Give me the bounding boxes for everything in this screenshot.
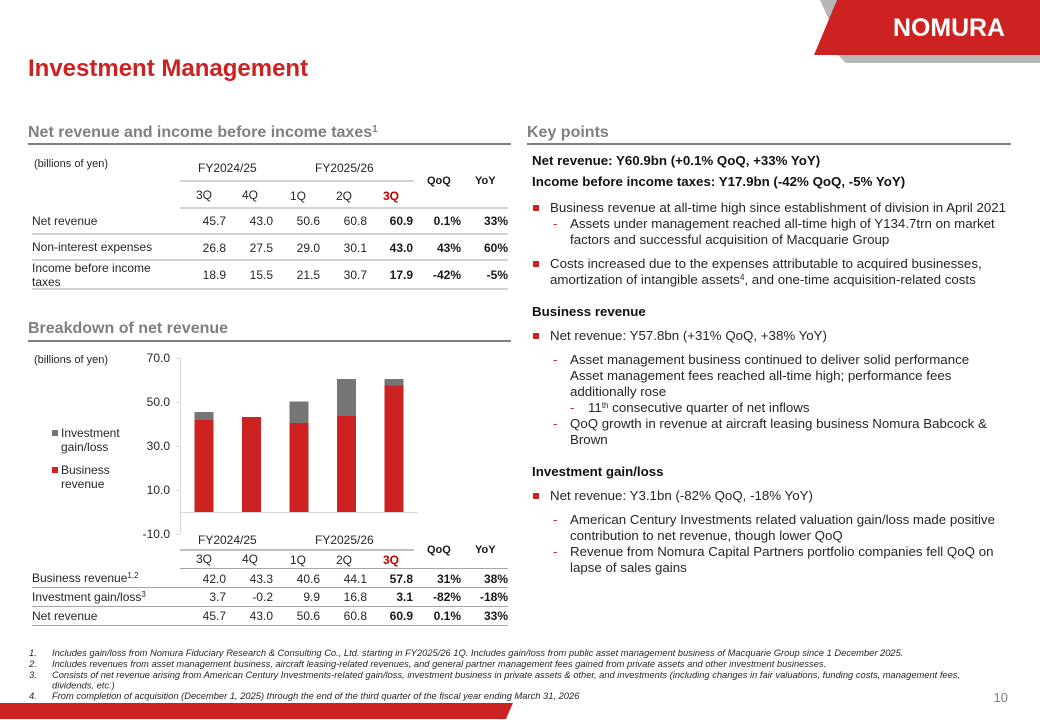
table: breakdown of net revenue: 3.1 [396,590,413,604]
table: breakdown of net revenue: -0.2 [252,590,273,604]
table: breakdown of net revenue: 60.8 [344,609,367,623]
business revenue section: 11 [588,400,602,415]
footnotes: 4. [29,691,37,701]
investment gain/loss section: Net revenue: Y3.1bn (-82% QoQ, -18% YoY) [550,488,813,503]
key points summary [532,153,905,189]
page number: 10 [994,690,1008,705]
business revenue section: - [553,416,557,431]
table: breakdown of net revenue: 3Q [383,553,399,567]
table: net revenue and income: FY2025/26 [315,161,374,175]
table: breakdown of net revenue: 31% [437,572,461,586]
table: breakdown of net revenue: FY2024/25 [198,533,257,547]
table: net revenue and income: 3Q [196,188,212,202]
table: net revenue and income: 43.0 [390,241,413,255]
investment gain/loss section: lapse of sales gains [570,560,687,575]
table: breakdown of net revenue: 43.0 [250,609,273,623]
table: breakdown of net revenue: Net revenue [32,609,98,623]
footnotes: dividends, etc.) [52,680,115,690]
key points bullets [533,200,1006,287]
table: net revenue and income [32,158,508,290]
footnotes: Includes gain/loss from Nomura Fiduciary Research & Consulting Co., Ltd. starting in FY2025/26 1Q. Includes gain/loss from public asset management business of Macquarie Group since 1 December 2025. [52,648,903,658]
business revenue section: - [553,352,557,367]
chart legend: Business [61,463,110,477]
footnotes: Consists of net revenue arising from American Century Investments-related gain/loss, investment business in private assets & other, and investments (including changes in fair valuations, funding costs, management fees, [52,670,960,680]
table: breakdown of net revenue: 0.1% [434,609,461,623]
table: breakdown of net revenue: 4Q [242,552,258,566]
table: breakdown of net revenue: -18% [480,590,508,604]
stacked bar chart: 50.0 [147,395,170,409]
key points bullets: Business revenue at all-time high since establishment of division in April 2021 [550,200,1006,215]
table: breakdown of net revenue: 44.1 [344,572,367,586]
key points bullets: amortization of intangible assets [550,272,740,287]
heading: key points: Key points [527,124,609,141]
table: net revenue and income: (billions of yen) [34,158,108,170]
key points bullets: Assets under management reached all-time high of Y134.7trn on market [570,216,995,231]
table: net revenue and income: 26.8 [203,241,226,255]
chart legend: Investment [61,426,120,440]
table: breakdown of net revenue: 9.9 [303,590,320,604]
stacked bar chart [34,351,418,541]
table: breakdown of net revenue: 40.6 [297,572,320,586]
business revenue section: th [602,401,608,410]
key points summary: Income before income taxes: Y17.9bn (-42% QoQ, -5% YoY) [532,174,905,189]
heading: net revenue and income [28,124,511,145]
title: Investment Management [28,55,308,82]
table: net revenue and income: 3Q [383,189,399,203]
chart legend: gain/loss [61,440,108,454]
table: breakdown of net revenue: 3.7 [209,590,226,604]
key points summary: Net revenue: Y60.9bn (+0.1% QoQ, +33% YoY) [532,153,820,168]
table: net revenue and income: Non-interest expenses [32,240,152,254]
table: net revenue and income: QoQ [427,175,451,187]
business revenue section: consecutive quarter of net inflows [608,400,810,415]
chart legend [52,426,120,491]
table: breakdown of net revenue: 50.6 [297,609,320,623]
table: net revenue and income: Net revenue [32,214,98,228]
investment gain/loss section: contribution to net revenue, though lower QoQ [570,528,843,543]
business revenue section: Business revenue [532,304,646,319]
heading: breakdown of net revenue: Breakdown of net revenue [28,320,228,337]
table: breakdown of net revenue: 33% [484,609,508,623]
footer bar [0,703,513,719]
investment gain/loss section: - [553,544,557,559]
stacked bar chart: (billions of yen) [34,354,108,366]
table: breakdown of net revenue: 3Q [196,552,212,566]
table: net revenue and income: 17.9 [390,268,413,282]
table: breakdown of net revenue: QoQ [427,544,451,556]
key points bullets: Costs increased due to the expenses attributable to acquired businesses, [550,256,982,271]
key points bullets: - [553,216,557,231]
footnotes: From completion of acquisition (December 1, 2025) through the end of the third quarter of the fiscal year ending March 31, 2026 [52,691,580,701]
investment gain/loss section: Revenue from Nomura Capital Partners portfolio companies fell QoQ on [570,544,993,559]
key points bullets: factors and successful acquisition of Macquarie Group [570,232,889,247]
table: breakdown of net revenue: Investment gain/loss [32,590,141,604]
key points bullets: , and one-time acquisition-related costs [744,272,976,287]
business revenue section: Asset management fees reached all-time high; performance fees [570,368,952,383]
table: breakdown of net revenue: 1,2 [127,571,139,580]
table: breakdown of net revenue: 57.8 [390,572,413,586]
footnotes: 2. [28,659,37,669]
table: breakdown of net revenue: 38% [484,572,508,586]
key points bullets: 4 [740,273,745,282]
heading: net revenue and income: 1 [372,124,378,135]
business revenue section [532,304,987,447]
footnotes: Includes revenues from asset management business, aircraft leasing-related revenues, and general partner management fees gained from private assets and other investment businesses. [52,659,826,669]
table: breakdown of net revenue: 43.3 [250,572,273,586]
table: net revenue and income: 21.5 [297,268,320,282]
table: net revenue and income: YoY [475,175,496,187]
business revenue section: additionally rose [570,384,666,399]
table: breakdown of net revenue: Business revenue [32,571,127,585]
table: net revenue and income: 33% [484,214,508,228]
investment gain/loss section: American Century Investments related valuation gain/loss made positive [570,512,995,527]
table: net revenue and income: 0.1% [434,214,461,228]
heading: net revenue and income: Net revenue and income before income taxes [28,124,372,141]
table: net revenue and income: 30.7 [344,268,367,282]
table: net revenue and income: 2Q [336,189,352,203]
investment gain/loss section: Investment gain/loss [532,464,664,479]
logo banner [814,0,1040,63]
business revenue section: Asset management business continued to deliver solid performance [570,352,969,367]
stacked bar chart: 10.0 [147,483,170,497]
table: breakdown of net revenue: YoY [475,544,496,556]
table: breakdown of net revenue: 3 [141,590,146,599]
table: breakdown of net revenue [32,533,508,626]
table: net revenue and income: 4Q [242,188,258,202]
table: breakdown of net revenue: 60.9 [390,609,413,623]
table: net revenue and income: -42% [433,268,461,282]
table: net revenue and income: 43% [437,241,461,255]
business revenue section: Brown [570,432,608,447]
investment gain/loss section [532,464,995,575]
table: breakdown of net revenue: FY2025/26 [315,533,374,547]
footnotes: 1. [29,648,37,658]
table: net revenue and income: 60% [484,241,508,255]
chart legend: revenue [61,477,105,491]
table: breakdown of net revenue: 42.0 [203,572,226,586]
table: net revenue and income: 50.6 [297,214,320,228]
table: net revenue and income: 27.5 [250,241,273,255]
table: net revenue and income: 29.0 [297,241,320,255]
table: net revenue and income: 43.0 [250,214,273,228]
investment gain/loss section: - [553,512,557,527]
table: net revenue and income: FY2024/25 [198,161,257,175]
table: breakdown of net revenue: 2Q [336,553,352,567]
table: breakdown of net revenue: 45.7 [203,609,226,623]
stacked bar chart: 70.0 [147,351,170,365]
table: net revenue and income: 60.8 [344,214,367,228]
table: net revenue and income: taxes [32,275,61,289]
business revenue section: QoQ growth in revenue at aircraft leasing business Nomura Babcock & [570,416,987,431]
table: net revenue and income: 30.1 [344,241,367,255]
footnotes [28,648,960,701]
table: net revenue and income: 45.7 [203,214,226,228]
table: net revenue and income: 18.9 [203,268,226,282]
table: net revenue and income: Income before income [32,261,151,275]
stacked bar chart: 30.0 [147,439,170,453]
table: net revenue and income: 15.5 [250,268,273,282]
logo banner: NOMURA [893,14,1005,42]
table: breakdown of net revenue: 1Q [290,553,306,567]
footnotes: 3. [29,670,37,680]
business revenue section: - [570,400,574,415]
business revenue section: Net revenue: Y57.8bn (+31% QoQ, +38% YoY) [550,328,827,343]
table: breakdown of net revenue: -82% [433,590,461,604]
stacked bar chart: -10.0 [143,527,170,541]
table: net revenue and income: -5% [487,268,508,282]
table: breakdown of net revenue: 16.8 [344,590,367,604]
table: net revenue and income: 60.9 [390,214,413,228]
table: net revenue and income: 1Q [290,189,306,203]
